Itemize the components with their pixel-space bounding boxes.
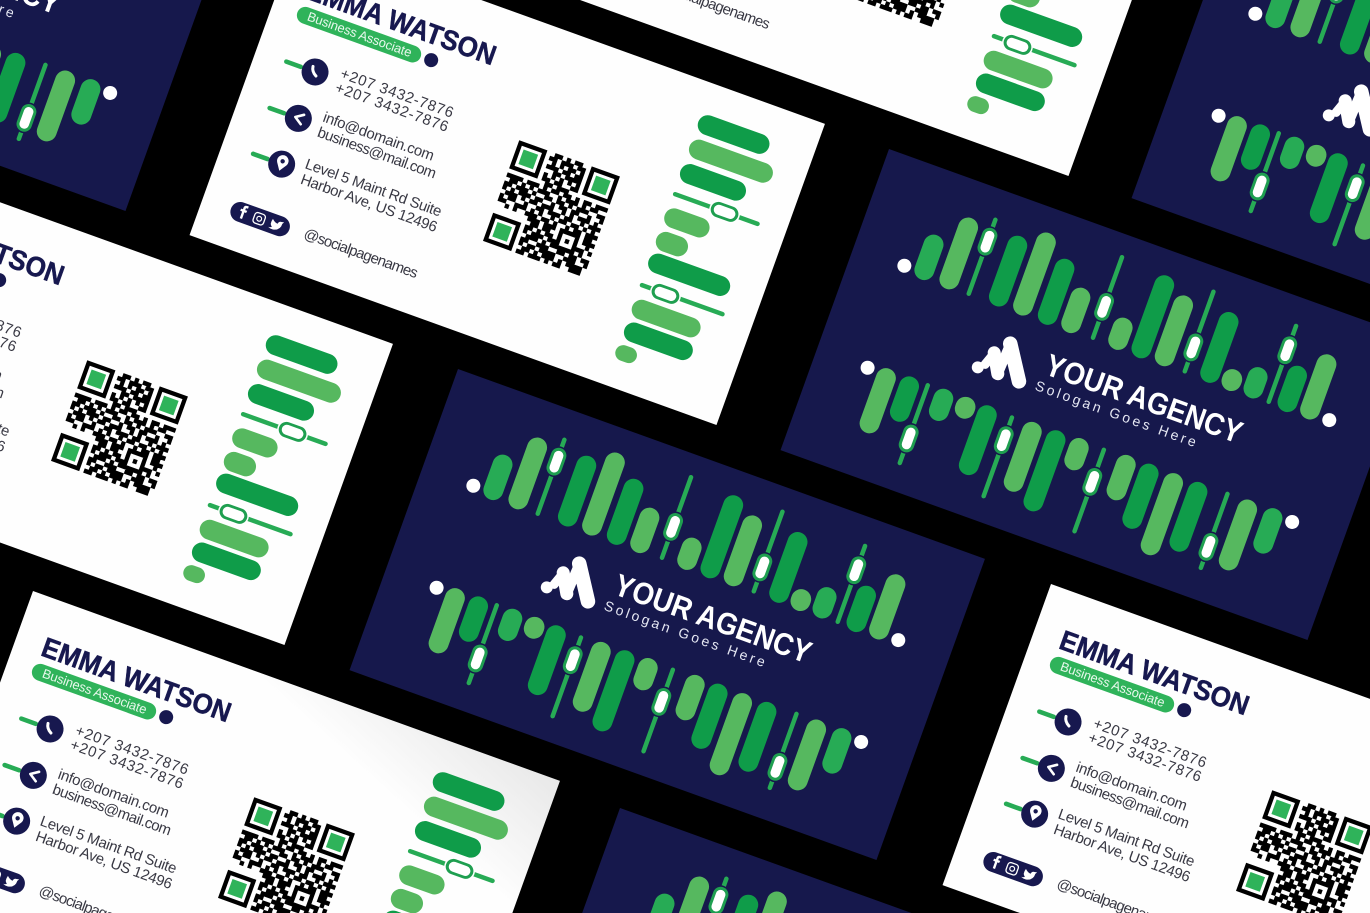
- logo mark: [970, 334, 1030, 388]
- white card: bottom left: Business Associate: [40, 666, 149, 717]
- role text: Business Associate: [305, 9, 414, 60]
- email addresses: info@domain.com: [321, 109, 436, 165]
- white card: bottom left: Harbor Ave, US 12496: [33, 828, 175, 893]
- icon: phone: [280, 48, 332, 89]
- QR code: [484, 142, 619, 275]
- white card: bottom right: Level 5 Maint Rd Suite: [1056, 806, 1197, 871]
- phone numbers: +207 3432-7876: [338, 65, 456, 122]
- white card: bottom left: EMMA WATSON: [38, 632, 235, 728]
- white card: bottom left: info@domain.com: [56, 766, 171, 822]
- navy dot: [422, 51, 440, 69]
- navy card: bottom: [512, 808, 1147, 913]
- white card: bottom left: Level 5 Maint Rd Suite: [38, 813, 179, 878]
- icon: location: [246, 140, 299, 181]
- agency name: YOUR AGENCY: [1041, 347, 1248, 450]
- card background: [190, 0, 825, 425]
- navy card: right: [781, 149, 1370, 640]
- white card: top center: business@mail.com: [315, 124, 439, 182]
- white card: bottom left: +207 3432-7876: [73, 722, 191, 779]
- navy card: top left: [0, 0, 234, 211]
- equalizer bars: [401, 404, 934, 824]
- white card: bottom right: +207 3432-7876: [1091, 715, 1209, 772]
- white card: bottom right: Business Associate: [1058, 659, 1167, 710]
- white card: bottom right: Harbor Ave, US 12496: [1051, 821, 1193, 886]
- navy card: top right: [1132, 0, 1370, 388]
- slogan: Sologan Goes Here: [602, 597, 768, 670]
- white card: bottom left: +207 3432-7876: [68, 736, 186, 793]
- address: Level 5 Maint Rd Suite: [303, 156, 444, 221]
- logo mark: [539, 554, 599, 608]
- slogan: Sologan Goes Here: [1033, 377, 1199, 450]
- agency name: YOUR AGENCY: [610, 567, 817, 670]
- white card: top center: [190, 0, 825, 425]
- social handle: @socialpagenames: [302, 225, 420, 282]
- navy card: center: [350, 369, 985, 860]
- white card: bottom right: +207 3432-7876: [1086, 729, 1204, 786]
- white card: top center: +207 3432-7876: [333, 79, 451, 136]
- equalizer bars: [832, 184, 1365, 604]
- white card: top center: Harbor Ave, US 12496: [298, 171, 440, 236]
- white card: top right: [542, 0, 1177, 176]
- green bars: [613, 112, 789, 389]
- white card: bottom right: info@domain.com: [1074, 759, 1189, 815]
- card background: [350, 369, 985, 860]
- white card: middle left: [0, 154, 393, 645]
- role pill: [294, 4, 424, 65]
- white card: bottom right: [943, 584, 1370, 913]
- white card: bottom right: EMMA WATSON: [1056, 625, 1253, 721]
- white card: bottom left: [0, 591, 560, 913]
- white card: bottom right: business@mail.com: [1068, 774, 1192, 832]
- white card: bottom left: business@mail.com: [50, 781, 174, 839]
- social icons: [228, 199, 293, 239]
- card background: [781, 149, 1370, 640]
- icon: email: [263, 95, 316, 136]
